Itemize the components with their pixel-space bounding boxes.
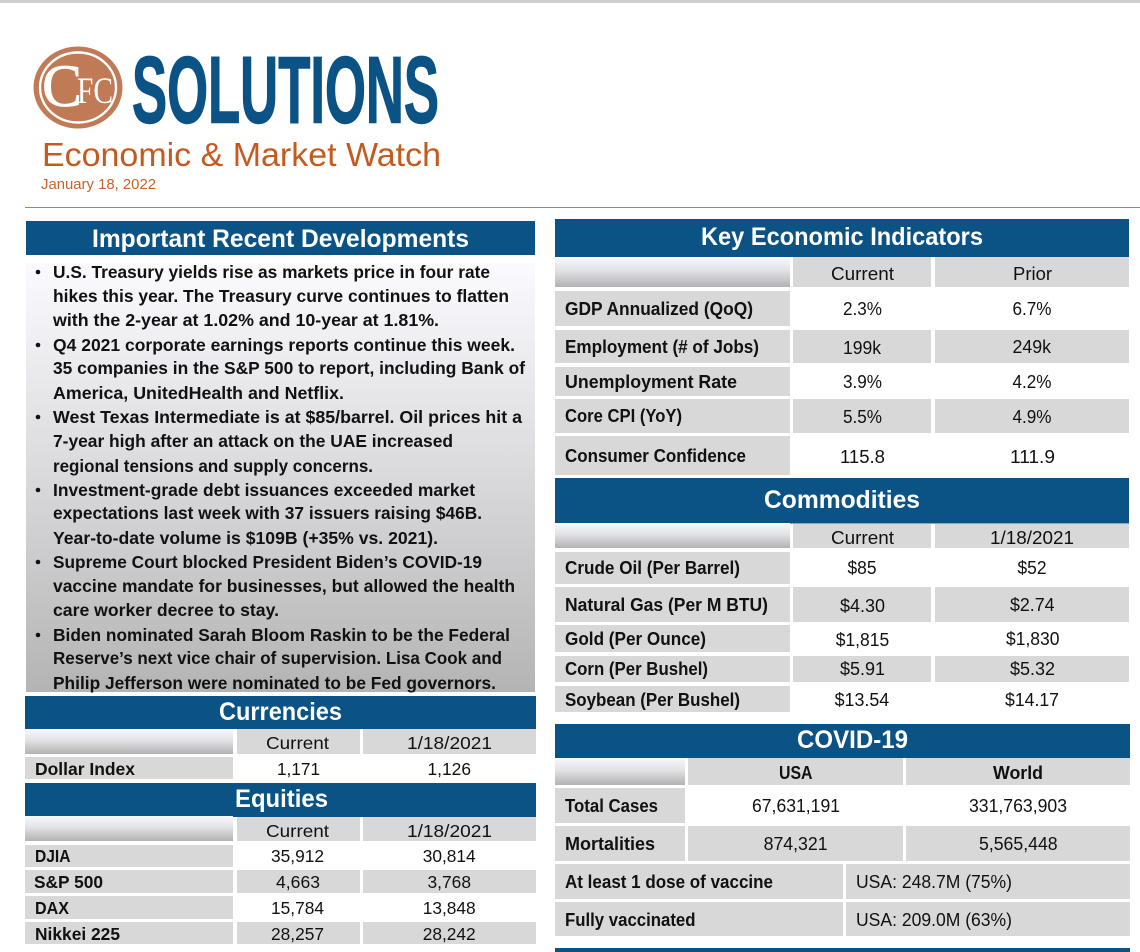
table: currencies: Dollar Index: [35, 759, 135, 779]
table: commodities: Corn (Per Bushel): [565, 658, 708, 679]
table: commodities: [555, 523, 1129, 712]
table: covid-19: At least 1 dose of vaccine: [565, 871, 773, 892]
table: key economic indicators: 3.9%: [843, 371, 882, 392]
heading: commodities: Commodities: [764, 486, 920, 514]
table: commodities: $13.54: [835, 689, 889, 710]
table: commodities: $85: [848, 557, 876, 578]
text block: development bullets: Reserve’s next vice chair of supervision. Lisa Cook and: [53, 648, 502, 668]
heading: key economic indicators: Key Economic Indicators: [701, 223, 983, 251]
table: commodities: 1/18/2021: [990, 527, 1074, 548]
table: key economic indicators: Prior: [1013, 263, 1052, 284]
table: equities: DJIA: [35, 846, 71, 866]
text block: development bullets: West Texas Intermediate is at $85/barrel. Oil prices hit a: [53, 407, 522, 427]
text block: development bullets: America, UnitedHealth and Netflix.: [53, 383, 344, 403]
table: commodities: $1,815: [836, 629, 889, 650]
table: equities: 28,257: [271, 924, 324, 944]
text block: development bullets: with the 2-year at 1.02% and 10-year at 1.81%.: [52, 310, 439, 330]
header: [34, 38, 441, 193]
table: key economic indicators: 4.9%: [1012, 406, 1052, 427]
table: key economic indicators: 4.2%: [1012, 371, 1052, 392]
table: covid-19: Total Cases: [565, 795, 658, 816]
panel: important recent developments: [26, 221, 535, 693]
table: covid-19: World: [993, 762, 1043, 783]
table: key economic indicators: Core CPI (YoY): [565, 405, 682, 426]
table: currencies: Current: [266, 733, 329, 753]
table: equities: Nikkei 225: [35, 924, 120, 944]
report title: Economic & Market Watch: [42, 137, 441, 174]
panel: key economic indicators: [555, 219, 1129, 475]
date: January 18, 2022: [41, 177, 156, 193]
table: key economic indicators: Employment (# of Jobs): [565, 336, 759, 357]
table: key economic indicators: Unemployment Rate: [565, 371, 737, 392]
table: commodities: $1,830: [1006, 628, 1060, 649]
heading: currencies: [25, 696, 536, 729]
panel: covid-19: [555, 724, 1130, 936]
table: key economic indicators: [555, 257, 1129, 475]
table: equities: 13,848: [423, 898, 476, 918]
icon: CFC logo: FC: [77, 71, 113, 112]
table: currencies: 1,171: [277, 759, 320, 779]
text block: development bullets: hikes this year. The Treasury curve continues to flatten: [53, 286, 509, 306]
text block: development bullets: Biden nominated Sarah Bloom Raskin to be the Federal: [53, 625, 510, 645]
table: covid-19: 874,321: [764, 833, 828, 854]
text block: development bullets: 35 companies in the S&P 500 to report, including Bank of: [53, 358, 525, 378]
text block: development bullets: [26, 262, 535, 693]
icon: CFC logo: [34, 46, 122, 128]
table: commodities: $5.32: [1010, 658, 1055, 679]
heading: key economic indicators: [555, 219, 1129, 257]
table: commodities: Gold (Per Ounce): [565, 628, 706, 649]
table: key economic indicators: Consumer Confidence: [565, 445, 746, 466]
table: currencies: 1/18/2021: [407, 733, 492, 753]
table: commodities: $5.91: [840, 658, 885, 679]
table: equities: 35,912: [271, 846, 324, 866]
table: key economic indicators: 249k: [1012, 336, 1052, 357]
text block: development bullets: 7-year high after an attack on the UAE increased: [53, 431, 453, 451]
table: key economic indicators: 5.5%: [843, 406, 882, 427]
table: key economic indicators: Current: [831, 263, 894, 284]
panel: commodities: [555, 478, 1129, 712]
table: equities: 1/18/2021: [407, 821, 492, 841]
table: covid-19: Fully vaccinated: [565, 909, 696, 930]
table: equities: S&P 500: [34, 872, 103, 892]
table: key economic indicators: GDP Annualized (QoQ): [565, 298, 753, 319]
table: commodities: $14.17: [1005, 689, 1059, 710]
panel: currencies: [25, 696, 536, 779]
text block: development bullets: Philip Jefferson were nominated to be Fed governors.: [53, 673, 496, 693]
table: equities: 4,663: [276, 872, 320, 892]
heading: equities: [25, 783, 536, 817]
table: currencies: [25, 729, 536, 779]
text block: development bullets: care worker decree to stay.: [53, 600, 279, 620]
table: key economic indicators: 199k: [843, 337, 882, 358]
table: commodities: Natural Gas (Per M BTU): [565, 594, 768, 615]
table: covid-19: Mortalities: [565, 833, 655, 854]
heading: covid-19: COVID-19: [797, 726, 908, 754]
text block: development bullets: Year-to-date volume is $109B (+35% vs. 2021).: [53, 528, 438, 548]
logo wordmark: SOLUTIONS: [132, 38, 439, 144]
table: commodities: $4.30: [840, 595, 885, 616]
text block: development bullets: Investment-grade debt issuances exceeded market: [53, 480, 475, 500]
heading: equities: Equities: [235, 785, 328, 813]
table: covid-19: 331,763,903: [969, 795, 1067, 816]
heading: covid-19: [555, 724, 1130, 758]
table: equities: 28,242: [423, 924, 476, 944]
table: covid-19: USA: [779, 762, 812, 783]
table: key economic indicators: 111.9: [1010, 446, 1055, 467]
table: key economic indicators: 6.7%: [1012, 298, 1052, 319]
table: commodities: Soybean (Per Bushel): [565, 689, 740, 710]
table: commodities: Crude Oil (Per Barrel): [565, 557, 740, 578]
text block: development bullets: Supreme Court blocked President Biden’s COVID-19: [53, 552, 482, 572]
table: covid-19: USA: 248.7M (75%): [856, 871, 1012, 892]
table: covid-19: USA: 209.0M (63%): [856, 909, 1012, 930]
table: commodities: $2.74: [1010, 594, 1054, 615]
text block: development bullets: regional tensions and supply concerns.: [53, 456, 373, 476]
table: covid-19: [555, 758, 1130, 936]
text block: development bullets: vaccine mandate for businesses, but allowed the health: [53, 576, 515, 596]
heading: commodities: [555, 478, 1129, 524]
panel: equities: [25, 783, 536, 944]
table: currencies: 1,126: [428, 759, 471, 779]
table: covid-19: 67,631,191: [752, 795, 840, 816]
text block: development bullets: Q4 2021 corporate earnings reports continue this week.: [53, 335, 515, 355]
table: key economic indicators: 2.3%: [843, 298, 882, 319]
table: commodities: Current: [831, 527, 894, 548]
table: equities: [25, 816, 536, 944]
text block: development bullets: U.S. Treasury yields rise as markets price in four rate: [53, 262, 490, 282]
table: covid-19: 5,565,448: [979, 833, 1058, 854]
table: equities: 30,814: [423, 846, 476, 866]
table: commodities: $52: [1018, 557, 1046, 578]
icon: CFC logo: C: [42, 53, 82, 119]
heading: important recent developments: [26, 221, 535, 255]
table: equities: DAX: [35, 898, 69, 918]
text block: development bullets: expectations last week with 37 issuers raising $46B.: [53, 503, 482, 523]
table: equities: 15,784: [271, 898, 324, 918]
table: key economic indicators: 115.8: [840, 446, 885, 467]
table: equities: Current: [266, 821, 329, 841]
next section heading bar: [555, 948, 1130, 952]
heading: important recent developments: Important Recent Developments: [92, 225, 469, 253]
heading: currencies: Currencies: [219, 698, 342, 726]
table: equities: 3,768: [428, 872, 471, 892]
